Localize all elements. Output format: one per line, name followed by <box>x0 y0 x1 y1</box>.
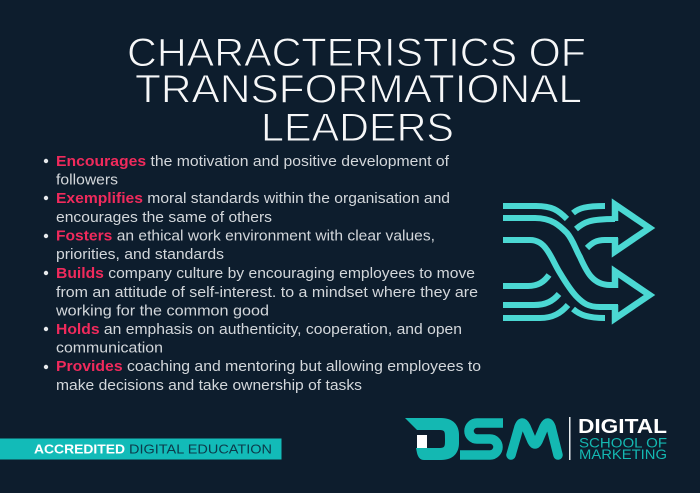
bullet: encourages <box>44 154 450 189</box>
title: LEADERS <box>261 106 454 150</box>
bullet: encourages: Encourages the motivation and positive development of <box>56 154 450 170</box>
bullet: fosters <box>44 229 435 263</box>
logo: Digital School of Marketing <box>405 415 667 462</box>
icon: crossing arrows <box>503 204 650 318</box>
bullet: builds: working for the common good <box>55 304 269 320</box>
bullet: fosters: Fosters an ethical work environment with clear values, <box>56 229 435 245</box>
bullet: exemplifies: Exemplifies moral standards within the organisation and <box>56 191 450 207</box>
logo wordmark: DIGITAL <box>578 415 667 438</box>
bullet: builds <box>44 266 478 320</box>
bullet: exemplifies: encourages the same of others <box>56 210 272 226</box>
bullet: fosters: priorities, and standards <box>56 247 224 263</box>
bullet: exemplifies <box>44 191 450 226</box>
logo mark: DSM <box>405 418 558 460</box>
accreditation band: ACCREDITED <box>34 442 125 456</box>
bullet list <box>44 154 481 394</box>
bullet: holds <box>44 322 462 357</box>
title <box>127 31 586 150</box>
bullet: holds: communication <box>56 341 163 357</box>
bullet: provides <box>44 359 481 394</box>
bullet: provides: make decisions and take ownership of tasks <box>56 378 362 394</box>
logo divider <box>569 417 570 460</box>
title: TRANSFORMATIONAL <box>135 68 582 112</box>
bullet: encourages: followers <box>56 173 118 189</box>
logo wordmark <box>578 415 667 462</box>
bullet: builds: Builds company culture by encouraging employees to move <box>56 266 475 282</box>
bullet: holds: Holds an emphasis on authenticity, cooperation, and open <box>56 322 462 338</box>
accreditation band <box>0 438 282 460</box>
title: CHARACTERISTICS OF <box>127 31 586 75</box>
accreditation band: DIGITAL EDUCATION <box>129 442 272 456</box>
logo wordmark: MARKETING <box>579 446 667 462</box>
logo wordmark: SCHOOL OF <box>579 434 667 450</box>
bullet: builds: from an attitude of self-interest. to a mindset where they are <box>56 285 478 301</box>
bullet: provides: Provides coaching and mentoring but allowing employees to <box>56 359 481 375</box>
